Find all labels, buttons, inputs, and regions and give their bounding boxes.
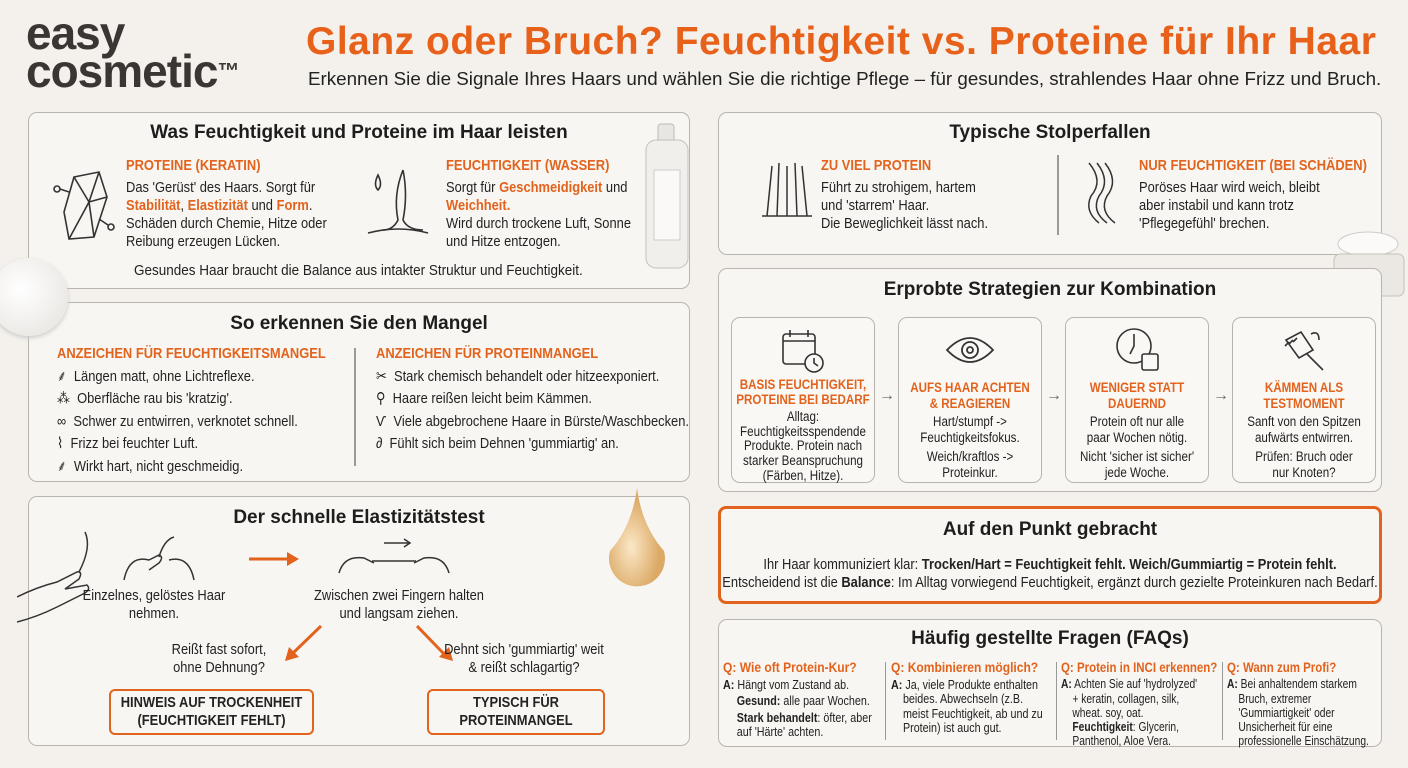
title: Glanz oder Bruch? Feuchtigkeit vs. Proteine für Ihr Haar	[306, 20, 1376, 63]
heading: Typische Stolperfallen	[949, 122, 1151, 143]
text: moisture: FEUCHTIGKEIT (WASSER)	[446, 157, 609, 174]
faq 1	[723, 659, 872, 739]
faq 3	[1061, 659, 1217, 748]
text: outcome 1	[172, 641, 266, 676]
faq 4	[1227, 659, 1369, 748]
text: too much protein	[821, 157, 988, 232]
arrow	[249, 552, 299, 566]
faq 1: Stark behandelt: öfter, aber	[737, 710, 872, 724]
text: outcome 2	[444, 641, 604, 676]
heading: Der schnelle Elastizitätstest	[233, 507, 485, 528]
text: outcome 2: Dehnt sich 'gummiartig' weit	[444, 641, 604, 658]
faq 3: Q: Protein in INCI erkennen?	[1061, 659, 1217, 675]
card: comb: KÄMMEN ALS	[1265, 380, 1343, 395]
arrow: left down	[285, 624, 322, 661]
box: protein: TYPISCH FÜR	[473, 694, 559, 711]
faq 4: Bruch, extremer	[1238, 692, 1311, 706]
faq 2: A: Ja, viele Produkte enthalten	[891, 678, 1038, 692]
box: dryness	[109, 689, 314, 735]
arrow: right down	[416, 625, 453, 661]
panel: functions	[28, 112, 690, 289]
subtitle: Erkennen Sie die Signale Ihres Haars und wählen Sie die richtige Pflege – für gesundes, strahlendes Haar ohne Frizz und Bruch.	[308, 68, 1381, 89]
list: protein deficit: ⚲ Haare reißen leicht beim Kämmen.	[376, 390, 592, 407]
text: outcome 1: ohne Dehnung?	[173, 659, 265, 676]
panel: elasticity test	[28, 496, 690, 746]
faq 1: A: Hängt vom Zustand ab.	[723, 678, 849, 692]
card: comb: Sanft von den Spitzen	[1247, 414, 1361, 429]
faq 4: Unsicherheit für eine	[1238, 720, 1332, 734]
arrow: →	[1213, 387, 1229, 404]
icon: hand	[17, 532, 90, 623]
text: proteins	[126, 157, 327, 250]
card: watch: Feuchtigkeitsfokus.	[920, 430, 1020, 444]
divider	[354, 348, 356, 466]
faq 4: 'Gummiartigkeit' oder	[1238, 706, 1335, 720]
faq 3: Feuchtigkeit: Glycerin,	[1072, 720, 1179, 734]
icon: pull hair	[338, 538, 450, 574]
text: too much protein: und 'starrem' Haar.	[821, 197, 929, 214]
text: step 2	[314, 587, 484, 622]
card: watch: Proteinkur.	[942, 464, 998, 480]
text: moisture	[446, 157, 631, 250]
arrow: →	[1046, 387, 1062, 404]
card: less: WENIGER STATT	[1090, 380, 1184, 395]
list: moisture deficit: ⸙ Wirkt hart, nicht geschmeidig.	[57, 458, 243, 474]
faq 3: A: Achten Sie auf 'hydrolyzed'	[1061, 677, 1197, 691]
card: less: jede Woche.	[1105, 464, 1169, 480]
panel: pitfalls	[718, 112, 1382, 255]
text: balance: Gesundes Haar braucht die Balance aus intakter Struktur und Feuchtigkeit.	[134, 262, 583, 279]
text: step 2: und langsam ziehen.	[339, 605, 459, 622]
faq 3: + keratin, collagen, silk,	[1072, 692, 1179, 706]
card: less: Protein oft nur alle	[1090, 414, 1184, 429]
text: too much protein: Führt zu strohigem, hartem	[821, 179, 976, 196]
text: moisture: Sorgt für Geschmeidigkeit und	[446, 179, 627, 196]
faq 2	[891, 659, 1043, 735]
text: proteins: PROTEINE (KERATIN)	[126, 157, 260, 174]
card: basis: PROTEINE BEI BEDARF	[736, 392, 870, 407]
panel: strategies	[718, 268, 1382, 492]
faq 1: auf 'Härte' achten.	[737, 725, 823, 739]
panel: FAQ	[718, 619, 1382, 747]
card: less: paar Wochen nötig.	[1087, 430, 1187, 444]
text: only moisture	[1139, 157, 1367, 232]
faq 4: professionelle Einschätzung.	[1238, 734, 1369, 748]
panel: signs	[28, 302, 690, 482]
icon: eye	[946, 337, 994, 363]
icon: bottle	[646, 124, 688, 268]
text: proteins: Das 'Gerüst' des Haars. Sorgt für	[126, 179, 315, 196]
faq 1: Gesund: alle paar Wochen.	[737, 694, 870, 708]
text: step 1	[83, 587, 226, 622]
card: basis: BASIS FEUCHTIGKEIT,	[740, 377, 866, 392]
arrow: →	[879, 387, 895, 404]
list: protein deficit: ANZEICHEN FÜR PROTEINMANGEL	[376, 345, 598, 362]
list: moisture deficit	[57, 345, 326, 474]
callout: summary	[718, 506, 1382, 604]
text: proteins: Reibung erzeugen Lücken.	[126, 233, 280, 250]
card: basis: (Färben, Hitze).	[763, 468, 843, 483]
icon: clock	[1116, 328, 1159, 371]
faq 2: beides. Abwechseln (z.B.	[903, 692, 1023, 706]
text: only moisture: 'Pflegegefühl' brechen.	[1139, 215, 1269, 232]
faq 4: Q: Wann zum Profi?	[1227, 659, 1336, 675]
card: less: Nicht 'sicher ist sicher'	[1080, 449, 1194, 464]
heading: So erkennen Sie den Mangel	[230, 313, 488, 334]
card: comb: Prüfen: Bruch oder	[1255, 449, 1353, 464]
text: moisture: Weichheit.	[446, 197, 510, 214]
list: protein deficit	[376, 345, 689, 452]
list: protein deficit: ✂ Stark chemisch behandelt oder hitzeexponiert.	[376, 368, 659, 384]
card: comb	[1232, 317, 1376, 483]
card: basis	[731, 317, 875, 483]
heading: Häufig gestellte Fragen (FAQs)	[911, 628, 1189, 649]
divider	[1057, 155, 1058, 235]
card: watch: Weich/kraftlos ->	[927, 449, 1013, 464]
list: protein deficit: Ѵ Viele abgebrochene Haare in Bürste/Waschbecken.	[376, 412, 689, 430]
text: step 1: nehmen.	[129, 605, 179, 622]
icon: foam circle	[0, 258, 68, 336]
card: watch: & REAGIEREN	[930, 396, 1010, 410]
list: moisture deficit: ANZEICHEN FÜR FEUCHTIGKEITSMANGEL	[57, 345, 326, 362]
list: moisture deficit: ⁂ Oberfläche rau bis 'kratzig'.	[57, 390, 233, 407]
faq 4: A: Bei anhaltendem starkem	[1227, 677, 1357, 691]
card: comb: nur Knoten?	[1272, 464, 1336, 480]
box: protein	[427, 689, 605, 735]
faq 2: Protein) ist auch gut.	[903, 721, 1002, 735]
card: less	[1065, 317, 1209, 483]
callout: summary: Entscheidend ist die Balance: Im Alltag vorwiegend Feuchtigkeit, ergänzt durch gezielte Proteinkuren nach Bedarf.	[722, 574, 1378, 591]
icon: fingers hold	[123, 536, 195, 580]
card: watch: Hart/stumpf ->	[933, 414, 1007, 429]
icon: oil drop	[609, 488, 665, 586]
heading: Was Feuchtigkeit und Proteine im Haar leisten	[150, 122, 568, 143]
list: moisture deficit: ⌇ Frizz bei feuchter Luft.	[57, 435, 198, 452]
card: watch: AUFS HAAR ACHTEN	[910, 380, 1030, 395]
logo: cosmetic™	[26, 45, 238, 97]
callout: summary: Auf den Punkt gebracht	[943, 519, 1157, 540]
card: watch	[898, 317, 1042, 483]
faq 2: meist Feuchtigkeit, ab und zu	[903, 706, 1043, 720]
list: moisture deficit: ⸙ Längen matt, ohne Lichtreflexe.	[57, 368, 255, 384]
text: only moisture: Poröses Haar wird weich, bleibt	[1139, 179, 1320, 196]
box: dryness: HINWEIS AUF TROCKENHEIT	[121, 694, 302, 711]
logo	[26, 7, 238, 97]
box: protein: PROTEINMANGEL	[459, 712, 573, 729]
text: too much protein: ZU VIEL PROTEIN	[821, 157, 931, 174]
text: moisture: und Hitze entzogen.	[446, 233, 561, 250]
text: proteins: Stabilität, Elastizität und Form.	[126, 197, 312, 214]
icon: limp hair	[1088, 162, 1116, 224]
logo: easy	[26, 7, 124, 59]
icon: cream jar	[1334, 232, 1404, 296]
text: proteins: Schäden durch Chemie, Hitze oder	[126, 215, 327, 232]
text: too much protein: Die Beweglichkeit lässt nach.	[821, 215, 988, 232]
card: basis: Produkte. Protein nach	[744, 438, 862, 453]
icon: hair follicle drop	[368, 170, 428, 234]
heading: Erprobte Strategien zur Kombination	[884, 279, 1216, 300]
icon: stiff hair	[762, 163, 812, 217]
faq 2: Q: Kombinieren möglich?	[891, 659, 1038, 675]
text: only moisture: NUR FEUCHTIGKEIT (BEI SCHÄDEN)	[1139, 157, 1367, 174]
faq 3: wheat. soy, oat.	[1072, 706, 1143, 720]
text: moisture: Wird durch trockene Luft, Sonne	[446, 215, 631, 232]
icon: comb	[1284, 331, 1324, 371]
text: outcome 2: & reißt schlagartig?	[468, 659, 580, 676]
box: dryness: (FEUCHTIGKEIT FEHLT)	[137, 712, 286, 729]
card: less: DAUERND	[1108, 396, 1166, 410]
list: moisture deficit: ∞ Schwer zu entwirren, verknotet schnell.	[57, 412, 298, 430]
list: protein deficit: ∂ Fühlt sich beim Dehnen 'gummiartig' an.	[376, 435, 619, 452]
icon: calendar	[782, 330, 824, 373]
text: step 2: Zwischen zwei Fingern halten	[314, 587, 484, 604]
card: comb: TESTMOMENT	[1263, 396, 1345, 410]
faq 3: Panthenol, Aloe Vera.	[1072, 734, 1171, 748]
text: step 1: Einzelnes, gelöstes Haar	[83, 587, 225, 604]
callout: summary: Ihr Haar kommuniziert klar: Trocken/Hart = Feuchtigkeit fehlt. Weich/Gummiartig = Protein fehlt.	[763, 556, 1337, 573]
faq 1: Q: Wie oft Protein-Kur?	[723, 659, 857, 675]
card: basis: starker Beanspruchung	[743, 453, 863, 468]
text: outcome 1: Reißt fast sofort,	[172, 641, 266, 658]
card: basis: Feuchtigkeitsspendende	[740, 424, 866, 439]
icon: keratin	[53, 171, 115, 240]
text: only moisture: aber instabil und kann trotz	[1139, 197, 1294, 214]
card: comb: aufwärts entwirren.	[1255, 430, 1353, 444]
card: basis: Alltag:	[787, 409, 819, 424]
